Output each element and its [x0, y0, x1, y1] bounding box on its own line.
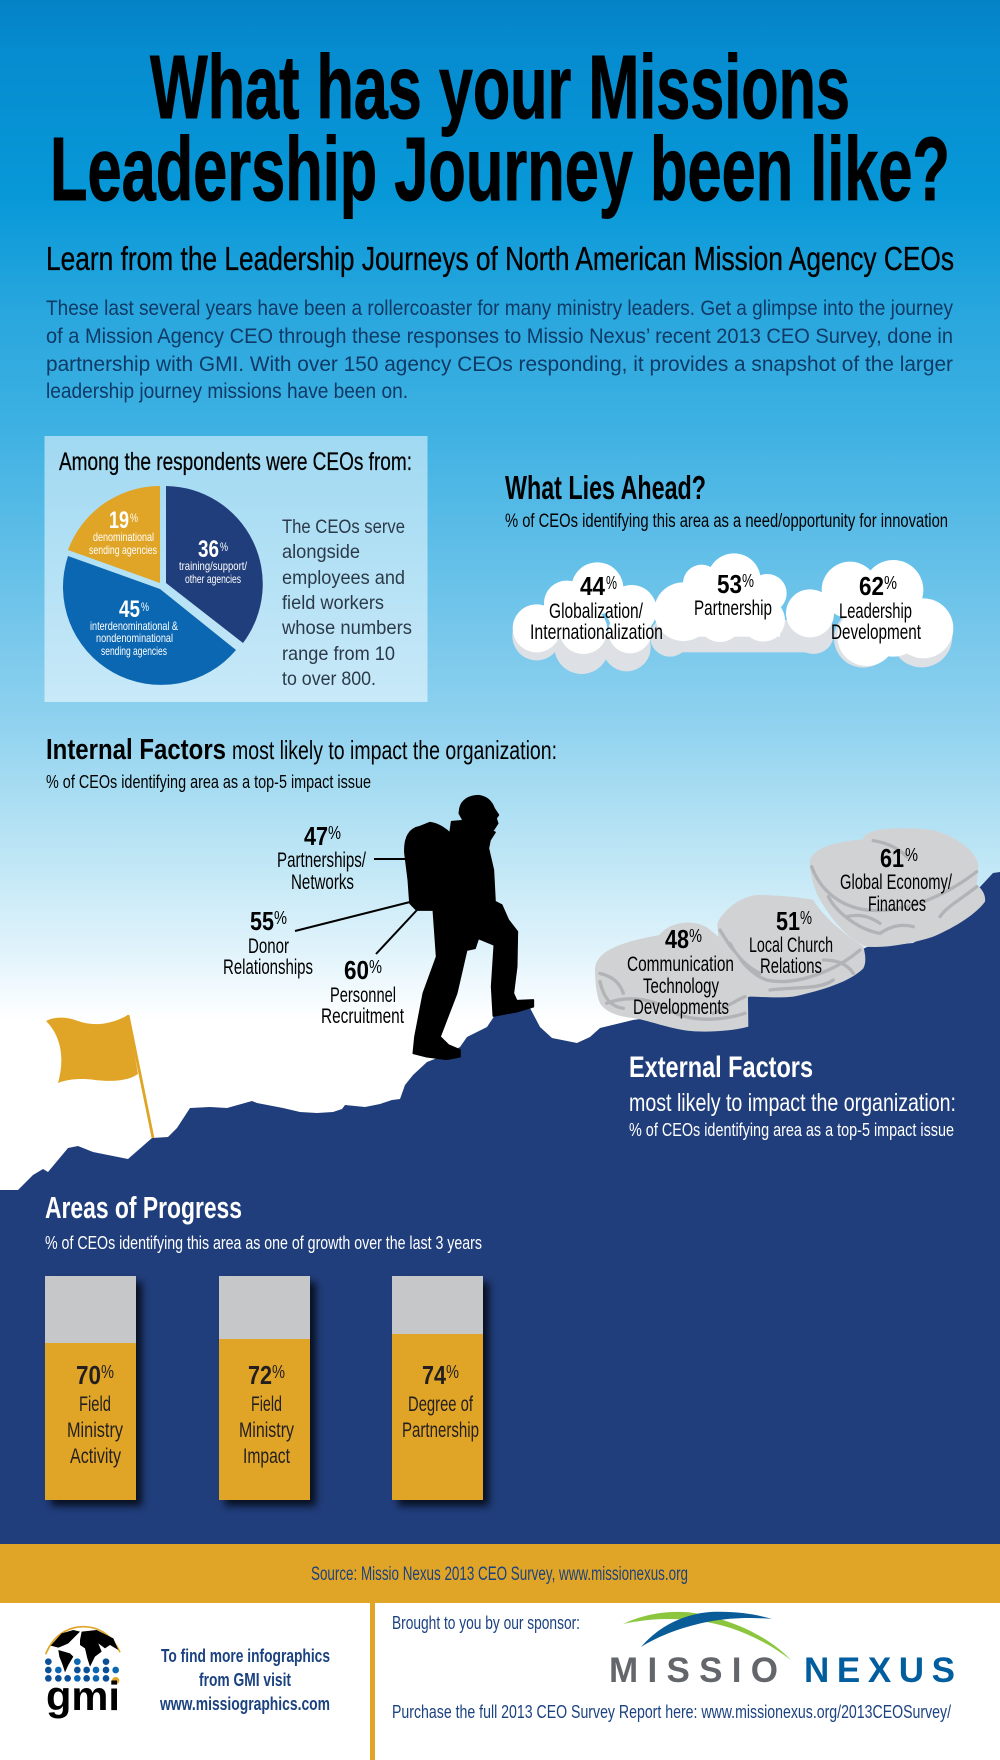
stepping stones: [595, 828, 985, 1032]
internal factor: 60%: %: [369, 957, 382, 977]
external factor: 48%: Communication: [627, 953, 734, 976]
bar: 70% field ministry activity: 70: [76, 1360, 101, 1390]
bar: 70% field ministry activity: Activity: [70, 1445, 121, 1468]
missio nexus logo: MISSIO: [609, 1651, 778, 1690]
bar: 70% field ministry activity: Field: [79, 1393, 111, 1416]
bar: 74% degree of partnership: [392, 1276, 489, 1506]
internal factor: 55%: %: [274, 908, 287, 928]
footer: more infographics: [159, 1646, 330, 1714]
internal factor: 47%: [277, 821, 366, 894]
gmi logo: [45, 1627, 120, 1719]
external factor: 51%: Local Church: [749, 934, 833, 957]
cloud: 44%: 44: [580, 571, 605, 601]
cloud: 53%: %: [742, 571, 754, 591]
external factor: 48%: %: [689, 926, 702, 946]
cloud: 62%: 62: [859, 571, 884, 601]
slice label 19%: %: [130, 511, 138, 525]
bar: 72% field ministry impact: Field: [251, 1393, 282, 1416]
bar: 72% field ministry impact: %: [272, 1362, 285, 1382]
slice label 36%: other agencies: [185, 572, 241, 586]
external factor: 51%: [749, 906, 833, 978]
heading: internal factors: most likely to impact the organization:: [232, 735, 557, 765]
external factor: 51%: Relations: [760, 955, 822, 978]
intro paragraph: [46, 297, 953, 403]
title: [50, 38, 950, 220]
internal factor: 60%: Recruitment: [321, 1005, 404, 1028]
bar: 74% degree of partnership: %: [446, 1362, 459, 1382]
intro paragraph: leadership journey missions have been on.: [46, 380, 408, 403]
internal factor: 60%: [321, 955, 404, 1028]
external factor: 48%: [627, 924, 734, 1019]
rock 1: [595, 923, 748, 1032]
slice label 19%: [89, 507, 157, 557]
cloud: 62%: %: [884, 573, 897, 593]
bar: 72% field ministry impact: [219, 1276, 316, 1506]
footer divider: [370, 1603, 375, 1760]
internal factor: 60%: Personnel: [330, 984, 396, 1007]
panel: respondents: [44, 436, 428, 702]
heading: areas of progress: [45, 1190, 482, 1253]
cloud: 44%: [530, 571, 663, 644]
footer: more infographics: To find more infographics: [161, 1646, 330, 1666]
slice label 19%: denominational: [93, 530, 154, 544]
heading: what lies ahead: What Lies Ahead?: [505, 469, 706, 506]
heading: areas of progress: Areas of Progress: [45, 1190, 242, 1225]
source band: [0, 1544, 1000, 1603]
internal factor: 47%: 47: [304, 821, 328, 851]
flag: [46, 1015, 153, 1138]
bar: 74% degree of partnership: Partnership: [402, 1419, 479, 1442]
slice label 45%: %: [141, 600, 149, 614]
slice label 36%: training/support/: [179, 559, 248, 573]
cloud: 53%: 53: [717, 569, 742, 599]
bar: 74% degree of partnership: 74: [422, 1360, 446, 1390]
footer background: [0, 1603, 1000, 1760]
cloud: 53%: [694, 569, 772, 620]
cloud: 44%: Internationalization: [530, 621, 663, 644]
external factor: 61%: Global Economy/: [840, 871, 952, 894]
external factor: 61%: [840, 843, 952, 916]
bar: 70% field ministry activity: %: [101, 1362, 114, 1382]
footer: sponsor label: Brought to you by our sponsor:: [392, 1612, 580, 1633]
slice label 36%: [179, 536, 248, 586]
footer: more infographics: www.missiographics.com: [159, 1694, 330, 1714]
internal factor: 55%: 55: [250, 906, 274, 936]
rock 2: [717, 895, 865, 997]
internal factor: 55%: Relationships: [223, 956, 313, 979]
internal factor: 47%: %: [328, 823, 341, 843]
slice label 19%: 19: [109, 507, 129, 534]
cloud: 62%: [831, 571, 921, 644]
panel side text: whose numbers: [281, 617, 412, 639]
panel side text: The CEOs serve: [282, 516, 405, 538]
bar: 72% field ministry impact: Impact: [243, 1445, 290, 1468]
gmi logo: gmi: [46, 1673, 120, 1719]
external factor: 48%: Technology: [643, 975, 719, 998]
slice label 45%: [90, 596, 178, 658]
cloud: 62%: Development: [831, 621, 921, 644]
internal factor: 47%: Networks: [291, 871, 354, 894]
slice label 45%: nondenominational: [96, 631, 173, 645]
external factor: 48%: Developments: [633, 996, 729, 1019]
heading: external factors: [629, 1051, 956, 1140]
hiker silhouette: [295, 796, 533, 1059]
cloud: 44%: Globalization/: [549, 600, 643, 623]
heading: internal factors: [46, 734, 557, 792]
internal factor: 55%: Donor: [248, 935, 289, 958]
heading: areas of progress: % of CEOs identifying this area as one of growth over the last 3 years: [45, 1232, 482, 1253]
slice label 45%: 45: [119, 596, 140, 623]
source band: Source: Missio Nexus 2013 CEO Survey, www.missionexus.org: [311, 1564, 688, 1585]
intro paragraph: of a Mission Agency CEO through these responses to Missio Nexus’ recent 2013 CEO Survey, done in: [46, 325, 953, 348]
cloud: 44%: %: [606, 573, 617, 593]
intro paragraph: partnership with GMI. With over 150 agency CEOs responding, it provides a snapshot of the larger: [46, 353, 953, 376]
panel heading: Among the respondents were CEOs from:: [59, 448, 412, 476]
slice label 36%: %: [220, 540, 228, 554]
heading: internal factors: % of CEOs identifying area as a top-5 impact issue: [46, 771, 371, 792]
internal factor: 55%: [223, 906, 313, 979]
bar: 74% degree of partnership: Degree of: [408, 1393, 473, 1416]
slice label 45%: sending agencies: [101, 644, 167, 658]
internal factor: 47%: Partnerships/: [277, 849, 366, 872]
rock 3: [810, 828, 985, 947]
slice label 36%: 36: [198, 536, 219, 563]
cloud: 62%: Leadership: [839, 600, 912, 623]
bar: 70% field ministry activity: Ministry: [67, 1419, 123, 1442]
bar: 70% field ministry activity: [45, 1276, 142, 1506]
panel side text: [281, 516, 412, 690]
panel side text: alongside: [282, 541, 360, 563]
missio nexus logo: NEXUS: [804, 1651, 955, 1690]
heading: external factors: External Factors: [629, 1051, 813, 1084]
footer: more infographics: from GMI visit: [199, 1670, 291, 1690]
panel side text: to over 800.: [282, 668, 376, 690]
panel side text: field workers: [282, 592, 384, 614]
external factor: 48%: 48: [665, 924, 689, 954]
external factor: 51%: 51: [776, 906, 800, 936]
external factor: 61%: %: [905, 845, 918, 865]
bar: 72% field ministry impact: 72: [248, 1360, 272, 1390]
pie chart: [63, 486, 263, 685]
bar: 72% field ministry impact: Ministry: [239, 1419, 294, 1442]
clouds: [512, 553, 953, 674]
slice label 19%: sending agencies: [89, 543, 157, 557]
heading: internal factors: Internal Factors: [46, 734, 226, 766]
cloud: 53%: Partnership: [694, 597, 772, 620]
panel side text: range from 10: [282, 643, 395, 665]
external factor: 61%: Finances: [868, 893, 926, 916]
internal factor: 60%: 60: [344, 955, 369, 985]
external factor: 61%: 61: [880, 843, 904, 873]
mountain: [0, 872, 1000, 1560]
external factor: 51%: %: [800, 908, 812, 928]
missio nexus logo: [609, 1612, 955, 1690]
heading: what lies ahead: [505, 469, 948, 532]
panel side text: employees and: [282, 567, 405, 589]
slice label 45%: interdenominational &: [90, 619, 178, 633]
callout lines: [295, 859, 417, 954]
